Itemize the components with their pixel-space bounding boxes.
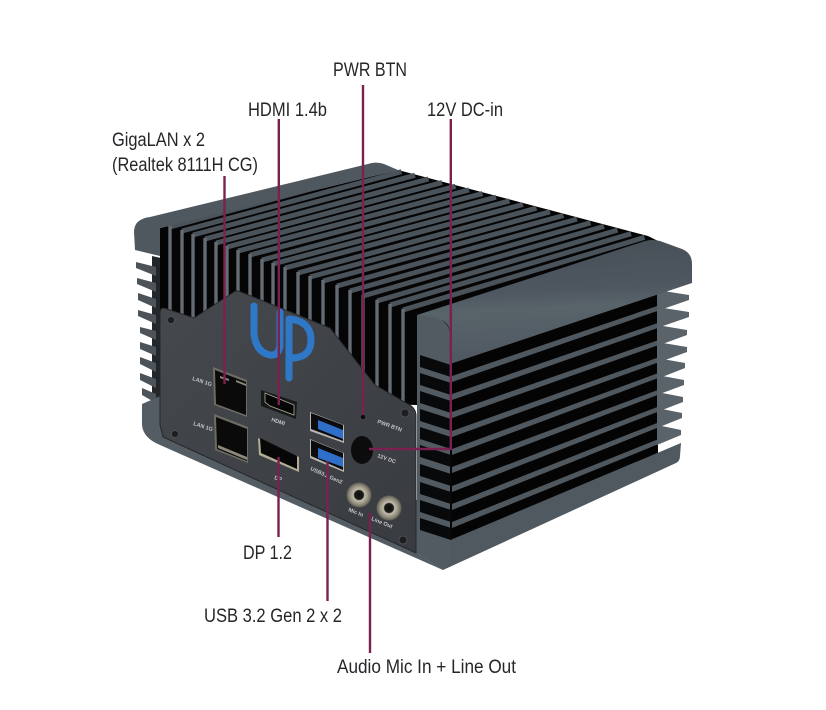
base of enclosure: [142, 394, 443, 570]
silkscreen port labels: Line Out: [370, 516, 393, 530]
device enclosure: [134, 163, 692, 570]
power button: [361, 415, 365, 419]
silkscreen port labels: [191, 376, 403, 530]
label: Audio Mic In + Line Out: Audio Mic In + Line Out: [337, 657, 517, 678]
port: USB 1: [310, 412, 344, 443]
label: Realtek 8111H CG: (Realtek 8111H CG): [112, 155, 258, 176]
port: HDMI: [261, 390, 297, 419]
front panel: [160, 291, 416, 553]
logo: UP: [254, 306, 311, 378]
black heatsink base: [160, 170, 660, 545]
label: USB 3.2 Gen 2 x 2: USB 3.2 Gen 2 x 2: [204, 606, 342, 627]
left side fin shadow: [152, 256, 161, 405]
label: HDMI 1.4b: HDMI 1.4b: [248, 100, 327, 121]
silkscreen port labels: USB3.2 Gen2: [309, 466, 343, 486]
left top rail: [134, 163, 398, 256]
front faces of top fins: [170, 226, 403, 403]
port: LAN 2: [214, 414, 248, 463]
left side fins: [136, 262, 156, 403]
label: GigaLAN x 2: GigaLAN x 2: [112, 130, 205, 151]
right side fins: [452, 290, 689, 528]
silkscreen port labels: PWR BTN: [376, 419, 403, 434]
silkscreen port labels: LAN 1G: [191, 376, 212, 388]
label: PWR BTN: PWR BTN: [333, 60, 407, 81]
label: 12V DC-in: 12V DC-in: [427, 100, 503, 121]
panel screws: [168, 316, 409, 544]
right top rail: [417, 240, 692, 364]
leader lines: [224, 85, 451, 653]
audio jack: mic in: [346, 482, 372, 508]
top fins: [170, 168, 644, 310]
silkscreen port labels: LAN 1G: [192, 421, 213, 433]
silkscreen port labels: 12V DC: [376, 453, 396, 465]
front pillar with slots: [417, 315, 451, 570]
silkscreen port labels: Mic In: [347, 507, 365, 519]
port: LAN 1: [213, 367, 247, 417]
black right side cavity: [452, 290, 658, 546]
silkscreen port labels: DP: [273, 475, 283, 483]
port: USB 2: [310, 439, 344, 472]
label: DP 1.2: DP 1.2: [243, 543, 292, 564]
port: DisplayPort: [258, 438, 299, 472]
silkscreen port labels: HDMI: [270, 417, 286, 427]
audio jack: line out: [376, 496, 402, 520]
bottom right rail: [417, 443, 681, 570]
DC jack: [351, 436, 373, 464]
